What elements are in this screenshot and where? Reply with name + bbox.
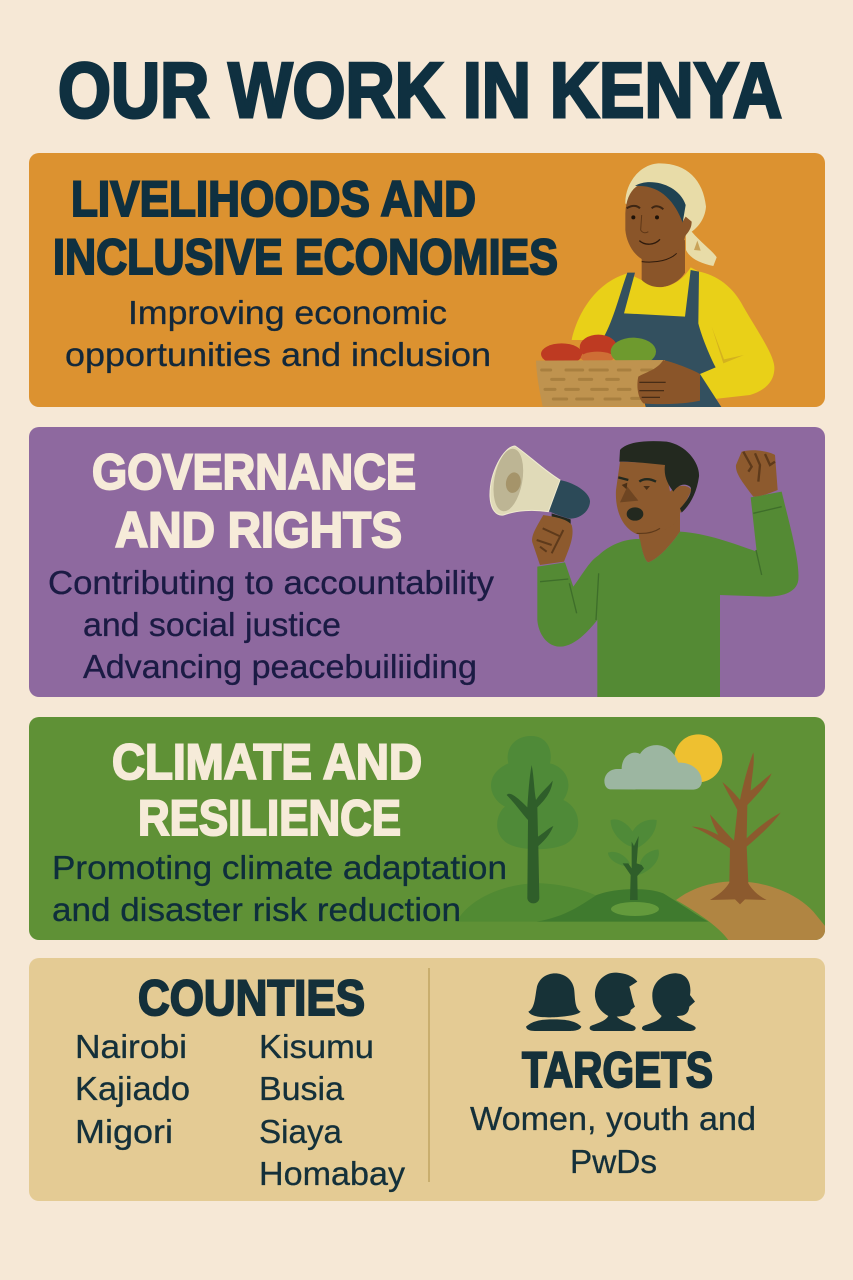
icon: three people silhouettes bbox=[526, 973, 696, 1031]
icon: bare tree on brown mound bbox=[676, 752, 828, 942]
panel: governance and rights bbox=[29, 427, 825, 698]
heading: governance: GOVERNANCE bbox=[92, 444, 416, 500]
heading: livelihoods: INCLUSIVE ECONOMIES bbox=[53, 229, 558, 285]
panel: livelihoods and inclusive economies bbox=[29, 153, 825, 408]
heading: climate bbox=[112, 734, 422, 846]
heading: governance bbox=[92, 444, 416, 558]
text: governance description bbox=[48, 564, 495, 685]
text: governance description: Advancing peacebuiliiding bbox=[83, 648, 477, 685]
icon: cloud bbox=[604, 745, 702, 790]
heading: counties: COUNTIES bbox=[138, 970, 365, 1026]
text: climate description: Promoting climate adaptation bbox=[52, 849, 507, 886]
heading: livelihoods: LIVELIHOODS AND bbox=[71, 171, 476, 227]
text: targets description bbox=[470, 1100, 756, 1180]
panel: climate and resilience bbox=[29, 717, 828, 942]
list: counties left column: Nairobi bbox=[75, 1028, 187, 1065]
text: targets description: Women, youth and bbox=[470, 1100, 756, 1137]
text: governance description: and social justice bbox=[83, 606, 341, 643]
heading: climate: CLIMATE AND bbox=[112, 734, 422, 790]
list: counties right column: Siaya bbox=[259, 1113, 343, 1150]
list: counties right column: Kisumu bbox=[259, 1028, 374, 1065]
icon: left tree bbox=[457, 736, 597, 922]
list: counties right column: Homabay bbox=[259, 1155, 406, 1192]
text: livelihoods description bbox=[65, 294, 491, 373]
text: livelihoods description: opportunities and inclusion bbox=[65, 336, 491, 373]
list: counties left column: Kajiado bbox=[75, 1070, 190, 1107]
icon: man with megaphone bbox=[489, 441, 798, 698]
icon: sun bbox=[674, 734, 722, 782]
list: counties left column bbox=[75, 1028, 190, 1150]
heading: targets: TARGETS bbox=[522, 1042, 713, 1098]
text: climate description bbox=[52, 849, 507, 928]
heading: governance: AND RIGHTS bbox=[115, 502, 402, 558]
text: governance description: Contributing to accountability bbox=[48, 564, 495, 601]
list: counties left column: Migori bbox=[75, 1113, 173, 1150]
icon: landscape with trees, sun and cloud bbox=[457, 734, 828, 942]
heading: livelihoods bbox=[53, 171, 558, 285]
text: livelihoods description: Improving economic bbox=[128, 294, 447, 331]
icon: woman with fruit basket bbox=[536, 163, 774, 408]
list: counties right column bbox=[259, 1028, 406, 1192]
text: targets description: PwDs bbox=[570, 1143, 657, 1180]
panel: counties and targets bbox=[29, 958, 825, 1201]
heading: climate: RESILIENCE bbox=[138, 790, 401, 846]
list: counties right column: Busia bbox=[259, 1070, 345, 1107]
text: climate description: and disaster risk reduction bbox=[52, 891, 461, 928]
icon: sapling on hill bbox=[537, 819, 708, 922]
